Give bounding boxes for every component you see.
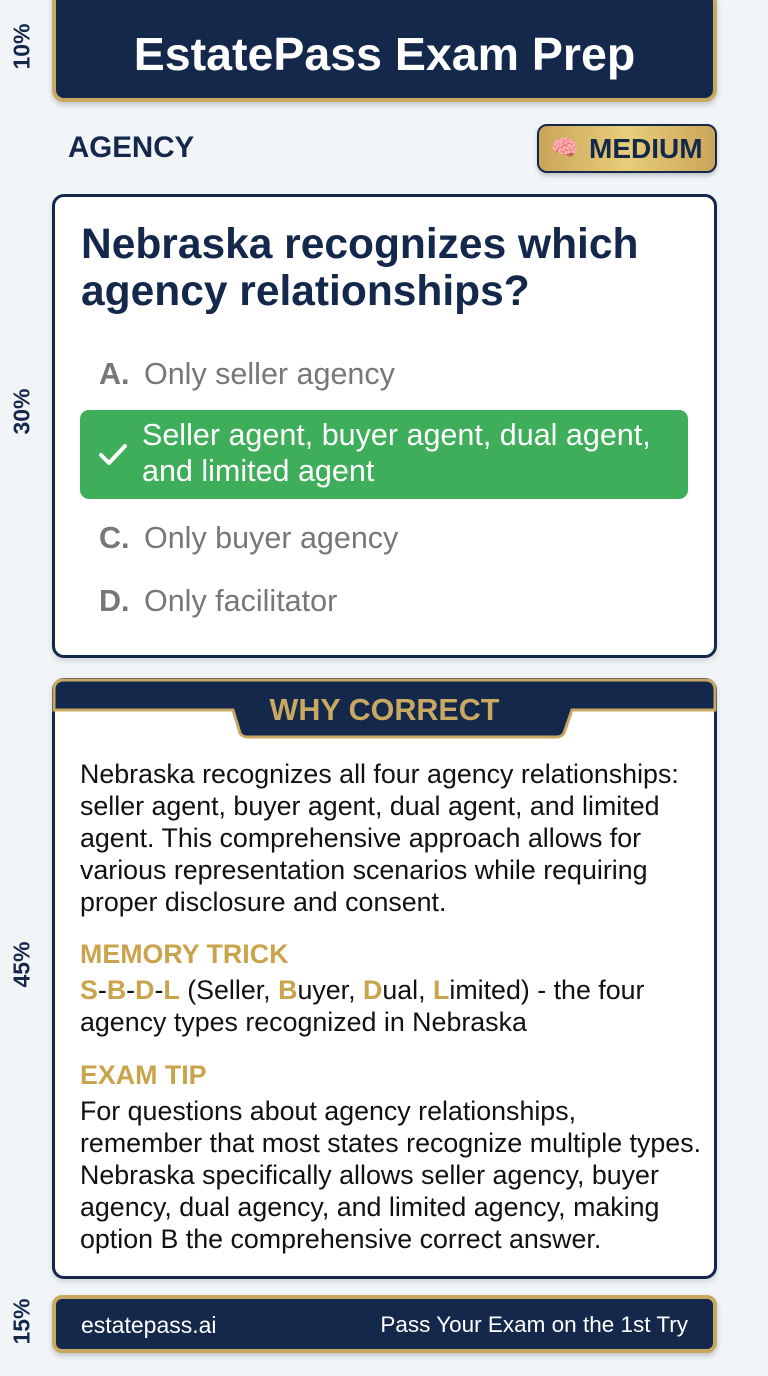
category label: AGENCY — [68, 131, 194, 164]
footer tagline: Pass Your Exam on the 1st Try — [380, 1312, 688, 1337]
option A: A. — [99, 357, 130, 391]
exam tip — [80, 1060, 701, 1254]
title: EstatePass Exam Prep — [134, 28, 635, 80]
footer url: estatepass.ai — [81, 1312, 217, 1338]
side label 15%: 15% — [8, 1298, 34, 1345]
option B correct — [80, 410, 688, 499]
exam tip: Nebraska specifically allows seller agency, buyer — [80, 1160, 659, 1190]
exam tip: For questions about agency relationships, — [80, 1096, 576, 1126]
option D: Only facilitator — [144, 584, 337, 618]
side label 30%: 30% — [8, 388, 34, 435]
question text — [81, 221, 638, 315]
explanation text: seller agent, buyer agent, dual agent, and limited — [80, 791, 660, 821]
exam tip: agency, dual agency, and limited agency, making — [80, 1192, 659, 1222]
panel: why correct — [52, 678, 717, 1279]
memory trick: MEMORY TRICK — [80, 939, 288, 969]
explanation text: Nebraska recognizes all four agency relationships: — [80, 759, 679, 789]
option A: Only seller agency — [144, 357, 395, 391]
memory trick: agency types recognized in Nebraska — [80, 1007, 527, 1037]
side label 45%: 45% — [8, 941, 34, 988]
heading: WHY CORRECT — [270, 693, 499, 727]
difficulty badge — [537, 124, 717, 173]
difficulty badge: MEDIUM — [589, 133, 703, 164]
panel: question card — [52, 194, 717, 658]
explanation text: various representation scenarios while requiring — [80, 855, 648, 885]
question text: agency relationships? — [81, 268, 530, 315]
option B correct: Seller agent, buyer agent, dual agent, — [142, 418, 651, 452]
memory trick: S-B-D-L (Seller, Buyer, Dual, Limited) - the four — [80, 975, 644, 1005]
option C: C. — [99, 521, 130, 555]
option B correct: and limited agent — [142, 454, 374, 488]
option D: D. — [99, 584, 130, 618]
exam tip: remember that most states recognize multiple types. — [80, 1128, 701, 1158]
explanation text — [80, 759, 679, 917]
option C: Only buyer agency — [144, 521, 398, 555]
side label 10%: 10% — [8, 23, 34, 70]
explanation text: proper disclosure and consent. — [80, 887, 446, 917]
footer — [52, 1295, 717, 1353]
header banner — [52, 0, 717, 102]
exam tip: option B the comprehensive correct answer. — [80, 1224, 601, 1254]
header band — [52, 678, 716, 738]
memory trick — [80, 939, 644, 1037]
explanation text: agent. This comprehensive approach allows for — [80, 823, 641, 853]
exam tip: EXAM TIP — [80, 1060, 207, 1090]
icon: check — [98, 444, 128, 466]
question text: Nebraska recognizes which — [81, 221, 638, 268]
icon: brain: 🧠 — [551, 135, 578, 160]
